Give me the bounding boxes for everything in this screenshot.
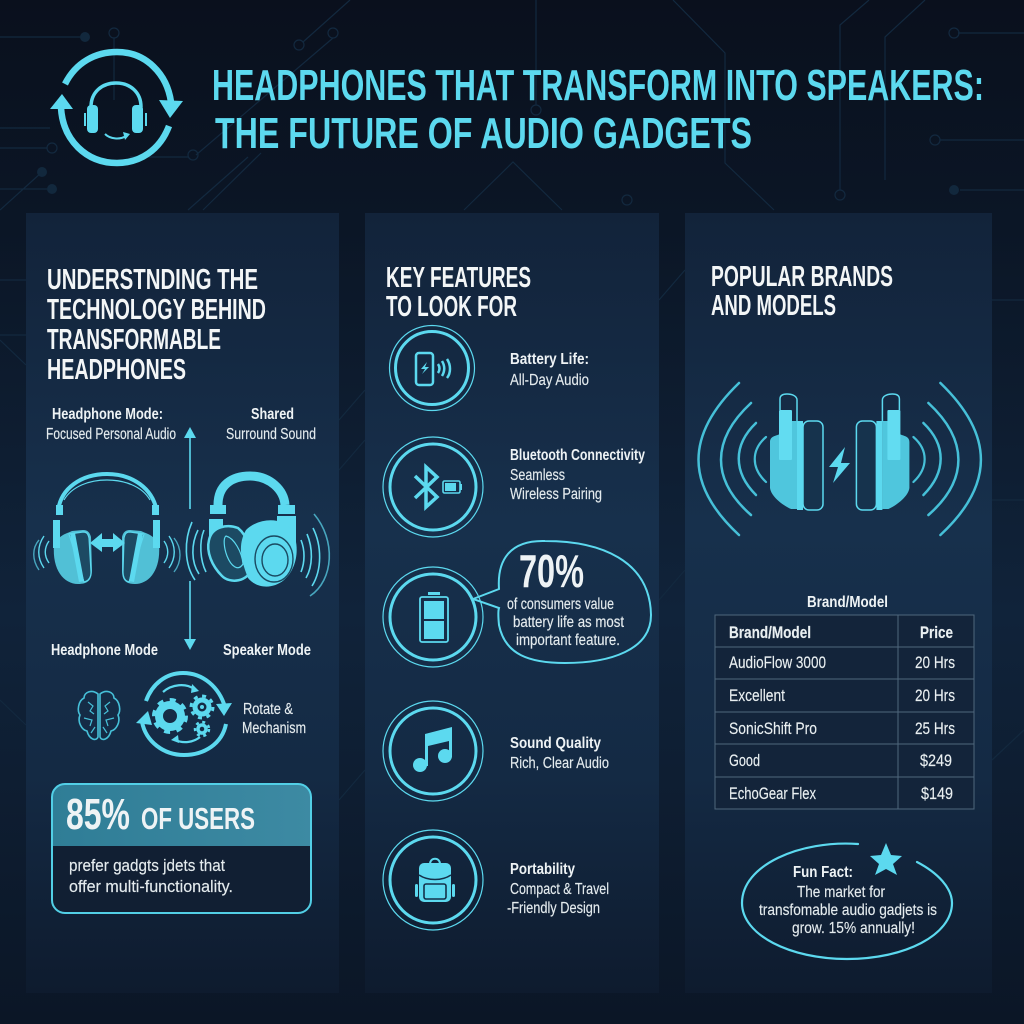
heading: popular brands	[711, 261, 893, 322]
title: THE FUTURE OF AUDIO GADGETS	[215, 109, 752, 158]
text: bluetooth connectivity: Bluetooth Connectivity	[510, 447, 645, 464]
heading: popular brands: AND MODELS	[711, 290, 836, 322]
callout: 85% of users: offer multi-functionality.	[69, 877, 233, 896]
label: headphone mode focused audio: Headphone Mode:	[52, 406, 163, 423]
text: bluetooth connectivity: Seamless	[510, 467, 565, 484]
table title: Brand/Model	[807, 594, 888, 611]
table: brand and model comparison: Good	[729, 751, 760, 770]
heading: key features: TO LOOK FOR	[386, 291, 517, 323]
table: brand and model comparison: Price	[920, 623, 953, 642]
heading: key features	[386, 262, 531, 323]
callout: 70% bubble	[473, 541, 651, 663]
label: headphone mode: Headphone Mode	[51, 642, 158, 659]
text: bluetooth connectivity	[510, 447, 645, 503]
icon: logo headphones with rotating arrows	[50, 52, 183, 163]
callout: fun fact: The market for	[797, 884, 886, 901]
icon: brain	[78, 691, 120, 739]
callout: 85% of users: prefer gadgts jdets that	[69, 856, 225, 875]
callout: 85% of users: OF USERS	[141, 801, 255, 836]
panel: understanding the technology	[26, 213, 339, 993]
text: portability: Portability	[510, 861, 575, 878]
heading: understanding the technology: HEADPHONES	[47, 354, 186, 386]
text: portability: Compact & Travel	[510, 881, 609, 898]
text: battery life: Battery Life:	[510, 351, 589, 368]
label: rotate and mechanism: Mechanism	[242, 720, 306, 737]
table: brand and model comparison: $149	[921, 784, 953, 803]
text: portability	[507, 861, 609, 917]
icon: rotating gears	[136, 673, 232, 755]
icon: headphones front view	[34, 474, 180, 584]
callout: 70% bubble: 70%	[519, 545, 584, 597]
table: brand and model comparison: 20 Hrs	[915, 686, 955, 705]
icon: star	[870, 843, 902, 875]
icon: bluetooth	[383, 437, 483, 537]
callout: 85% of users	[52, 784, 311, 913]
table: brand and model comparison: Brand/Model	[729, 623, 811, 642]
callout: 70% bubble: of consumers value	[507, 596, 614, 613]
table: brand and model comparison: EchoGear Flex	[729, 784, 816, 803]
text: sound quality	[510, 735, 609, 772]
panel: key features	[365, 213, 659, 993]
callout: fun fact: grow. 15% annually!	[792, 920, 915, 937]
label: shared surround sound: Surround Sound	[226, 426, 316, 443]
panel: popular brands	[685, 213, 992, 993]
text: bluetooth connectivity: Wireless Pairing	[510, 486, 602, 503]
heading: popular brands: POPULAR BRANDS	[711, 261, 893, 293]
callout: 70% bubble: battery life as most	[513, 614, 624, 631]
text: battery life	[510, 351, 589, 389]
callout: fun fact: Fun Fact:	[793, 864, 853, 881]
text: sound quality: Rich, Clear Audio	[510, 755, 609, 772]
icon: earcups with sound waves	[698, 383, 981, 535]
heading: understanding the technology: TECHNOLOGY BEHIND	[47, 294, 266, 326]
table: brand and model comparison: 20 Hrs	[915, 653, 955, 672]
label: shared surround sound: Shared	[251, 406, 294, 423]
heading: key features: KEY FEATURES	[386, 262, 531, 294]
heading: understanding the technology: UNDERSTNDING THE	[47, 264, 258, 296]
text: sound quality: Sound Quality	[510, 735, 601, 752]
arrow: down	[184, 581, 196, 650]
heading: understanding the technology: TRANSFORMABLE	[47, 324, 221, 356]
callout: fun fact: transfomable audio gadjets is	[759, 902, 937, 919]
label: speaker mode: Speaker Mode	[223, 642, 311, 659]
text: battery life: All-Day Audio	[510, 372, 589, 389]
table: brand and model comparison: $249	[920, 751, 952, 770]
table: brand and model comparison: SonicShift Pro	[729, 719, 817, 738]
text: portability: -Friendly Design	[507, 900, 600, 917]
icon: battery	[383, 567, 483, 667]
heading: understanding the technology	[47, 264, 266, 386]
table: brand and model comparison: AudioFlow 3000	[729, 653, 826, 672]
icon: music note	[383, 701, 483, 801]
callout: fun fact	[742, 843, 952, 959]
label: rotate and mechanism: Rotate &	[243, 701, 293, 718]
callout: 70% bubble: important feature.	[516, 632, 620, 649]
icon: headphones speaker view	[186, 476, 329, 596]
table: brand and model comparison: 25 Hrs	[915, 719, 955, 738]
icon: phone with sound waves	[390, 326, 474, 410]
callout: 85% of users: 85%	[66, 790, 130, 839]
arrow: up	[184, 427, 196, 509]
label: shared surround sound	[226, 406, 316, 443]
table: brand and model comparison: Excellent	[729, 686, 785, 705]
icon: backpack	[383, 830, 483, 930]
label: headphone mode focused audio: Focused Personal Audio	[46, 426, 176, 443]
label: headphone mode focused audio	[46, 406, 176, 443]
table: brand and model comparison	[715, 615, 974, 809]
label: rotate and mechanism	[242, 701, 306, 737]
title	[212, 61, 984, 158]
